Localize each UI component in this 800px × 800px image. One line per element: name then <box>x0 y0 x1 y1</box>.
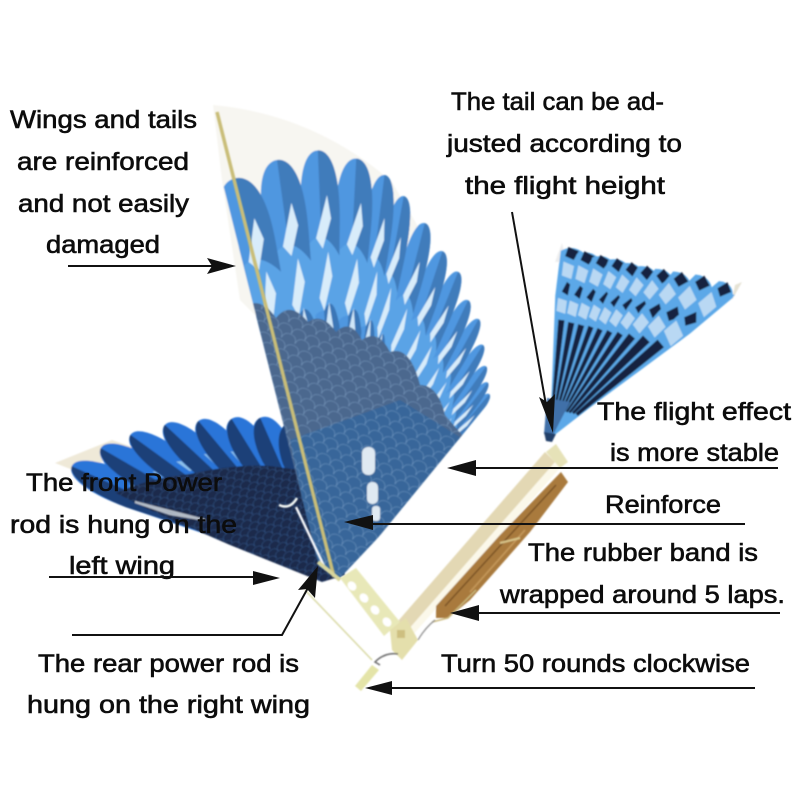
callout: rubber band: The rubber band is <box>528 539 758 567</box>
callout: front power rod: The front Power <box>26 469 222 497</box>
callout: rubber band: wrapped around 5 laps. <box>499 581 785 609</box>
callout: tail adjustment: justed according to <box>446 130 682 158</box>
arrow: flight effect <box>447 460 778 476</box>
callout: front power rod <box>10 469 237 580</box>
callout: flight effect <box>597 398 791 467</box>
arrow: rear power rod <box>72 566 318 635</box>
callout: tail adjustment <box>446 88 682 200</box>
illustration: left wing <box>55 410 351 593</box>
callout: rear power rod: The rear power rod is <box>38 650 299 678</box>
wire hook <box>375 654 398 665</box>
callout: wings and tails reinforced: Wings and tails <box>10 106 197 134</box>
white spots on wing <box>362 447 380 521</box>
arrow: to tail <box>512 212 555 433</box>
front clip <box>546 444 568 468</box>
callout: wings and tails reinforced: damaged <box>46 231 160 259</box>
callout: wings and tails reinforced: are reinforced <box>17 148 189 176</box>
illustration: wing spar rod <box>217 112 340 580</box>
callout: tail adjustment: the flight height <box>465 172 665 200</box>
callout: flight effect: The flight effect <box>597 398 791 426</box>
main beam <box>392 452 558 640</box>
callout: rear power rod: hung on the right wing <box>27 691 310 719</box>
illustration: right wing <box>210 105 494 584</box>
callout: front power rod: left wing <box>69 552 175 580</box>
arrow: rubber band <box>450 605 780 621</box>
callout: turn 50 rounds: Turn 50 rounds clockwise <box>441 650 750 678</box>
arrow: reinforce <box>344 515 745 530</box>
illustration: wooden frame and rubber band <box>305 444 568 691</box>
callout: reinforce: Reinforce <box>605 491 721 519</box>
callout: rubber band <box>499 539 785 609</box>
callout: wings and tails reinforced <box>10 106 197 259</box>
arrow: front power rod <box>49 571 280 585</box>
illustration: tail <box>538 243 742 445</box>
yellow crossbar <box>340 568 400 636</box>
propeller tip <box>355 665 379 691</box>
arrow: turn 50 rounds <box>365 681 755 695</box>
arrow: to wing edge <box>68 258 236 274</box>
callout: tail adjustment: The tail can be ad- <box>451 88 664 116</box>
clamp block <box>390 618 418 660</box>
callout: wings and tails reinforced: and not easily <box>18 190 190 218</box>
thin rod <box>305 590 372 660</box>
callout: rear power rod <box>27 650 310 719</box>
callout: front power rod: rod is hung on the <box>10 511 237 539</box>
callout: flight effect: is more stable <box>610 439 779 467</box>
rubber band <box>436 472 568 618</box>
